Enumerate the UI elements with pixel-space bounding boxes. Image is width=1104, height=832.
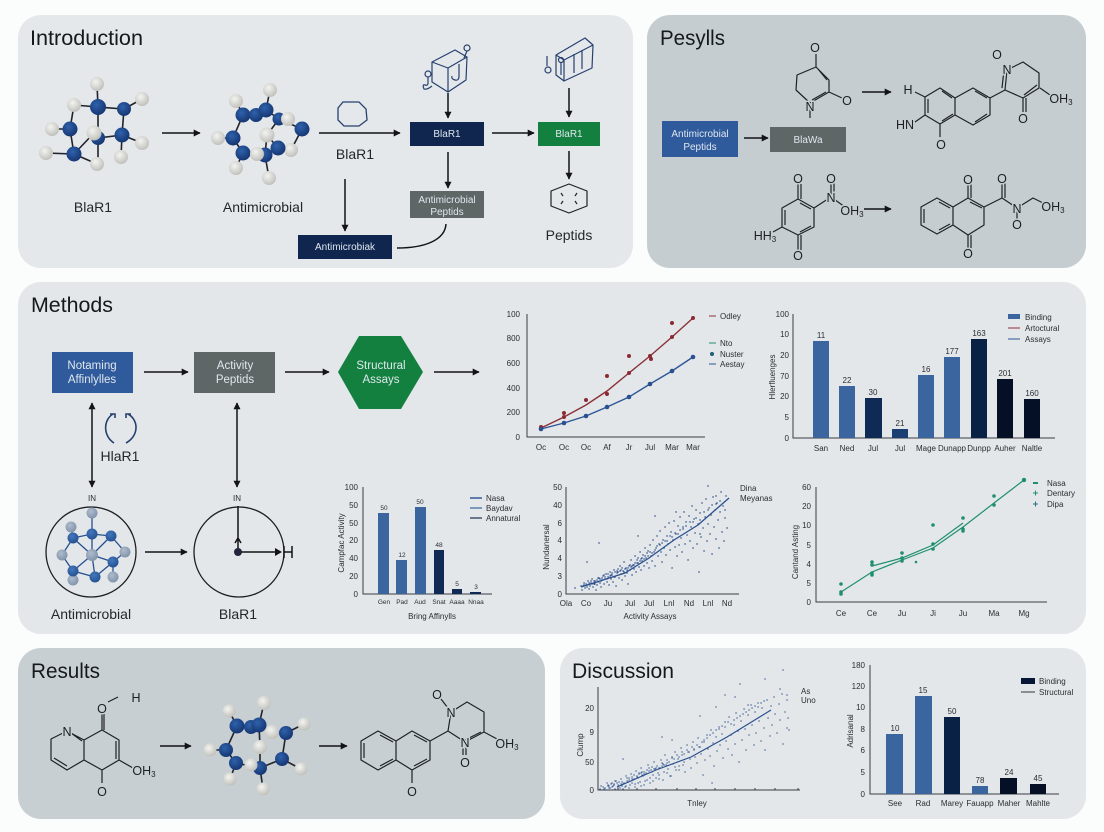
arrow [160,745,191,747]
chart: bar chart top: Hlerfluenges [768,355,777,399]
chart: line chart top [507,310,744,452]
legend [1008,313,1059,344]
chart: green line chart: Cantand Asting [791,525,800,579]
chart: bar chart top: 10 [780,330,790,339]
chart: bar chart bottom left: Bring Affinylls [408,612,456,621]
legend: Meyanas [740,494,772,503]
chart: bar chart bottom left: 48 [435,542,443,549]
structure: quinoline [51,691,156,799]
structure: bottom naphthoquinone [921,172,1065,261]
structure: bottom quinone: 3 [859,210,864,219]
chart: bar chart top: Auher [994,444,1016,453]
legend: Binding [1039,677,1066,686]
chart: bar chart top: 177 [945,347,959,356]
chart: bar chart top: 16 [922,365,931,374]
label: HlaR1: HlaR1 [101,448,140,464]
box: navy BlaR1: BlaR1 [433,129,461,140]
structure: top ring: N [805,100,815,114]
chart: bar chart bottom left: 40 [349,554,359,563]
structure: bottom quinone: O [793,172,803,186]
box: activity peptids: Activity [217,360,253,372]
legend [470,494,520,523]
chart: bar chart: Rad [916,799,930,808]
box: gray: BlaWa [793,135,823,146]
arrow [434,371,479,373]
structure: bottom naphthoquinone: 3 [1060,206,1065,215]
chart: bar chart top: 160 [1025,389,1039,398]
chart: line chart top: Mar [686,443,700,452]
chart: bar chart bottom left [337,483,520,621]
structure: bottom quinone: O [793,249,803,263]
chart: bar chart bottom left: Gen [378,599,391,606]
icon: molecule in circle [46,507,136,597]
structure: bottom naphthoquinone: O [997,172,1007,186]
chart: bar chart top: 201 [998,369,1012,378]
structure: bottom quinone: N [826,191,836,205]
chart: bar chart top: 100 [776,310,790,319]
chart: scatter activity assays: Ola [560,599,573,608]
legend: Binding [1025,313,1052,322]
arrow [744,137,768,139]
chart: scatter activity assays: 4 [558,554,563,563]
chart: bar chart: Mahlte [1026,799,1051,808]
structure: bottom quinone: OH [840,204,859,218]
chart: bar chart top: 11 [817,331,826,340]
structure: bottom quinone: 3 [772,235,777,244]
chart: bar chart top: Dunpp [967,444,991,453]
chart: scatter activity assays: 50 [553,483,563,492]
heading: pesylls: Pesylls [660,27,725,50]
chart: bar chart: 0 [861,790,866,799]
arrow [319,745,347,747]
chart: bar chart top: Mage [916,444,937,453]
chart: green line chart: 5 [807,541,812,550]
arrow [344,179,346,231]
chart: scatter: Tnley [687,799,707,808]
arrow [319,132,400,134]
structure: naphthyl heterocycle: 3 [514,743,519,752]
chart: scatter: 20 [585,704,595,713]
structure: naphthyl heterocycle: O [407,785,417,799]
legend: Baydav [486,504,513,513]
arrow [447,152,449,188]
structure: top ring: O [842,94,852,108]
icon: results ball-and-stick molecule [204,696,310,796]
label: antimicrobial: Antimicrobial [223,199,303,215]
legend [801,687,816,705]
label: BlaR1: BlaR1 [74,199,112,215]
box: navy antimicrobial: Antimicrobiak [315,242,376,253]
chart: bar chart: 6 [861,746,866,755]
structure: fused ring [896,48,1073,152]
icon: cube [423,45,470,92]
chart: line chart top: Oc [559,443,569,452]
chart: green line chart: Mg [1018,609,1030,618]
chart: scatter: 0 [590,786,595,795]
chart: bar chart: 24 [1005,768,1014,777]
structure: naphthyl heterocycle: N [446,706,456,720]
chart: bar chart: Maher [998,799,1021,808]
box: antimicrobial peptids: Peptids [683,142,717,153]
chart: scatter activity assays: Ju [604,599,612,608]
heading: results: Results [31,660,100,683]
icon: antimicrobial ball-and-stick molecule [211,83,310,185]
legend: Aestay [720,360,744,369]
chart: bar chart bottom left: 20 [349,572,359,581]
panel: results [18,648,545,819]
arrow [447,93,449,118]
structure: quinoline: O [97,702,107,716]
chart: bar chart top: Naltle [1022,444,1043,453]
chart: bar chart: 15 [919,686,928,695]
chart: scatter activity assays: Lnl [664,599,675,608]
chart: bar chart top: 21 [896,419,905,428]
chart: line chart top: Jul [645,443,655,452]
chart: scatter: 50 [585,758,595,767]
chart: bar chart top: Ned [840,444,854,453]
chart: scatter [576,670,816,808]
legend: Nasa [486,494,505,503]
chart: scatter activity assays: Co [581,599,592,608]
chart: scatter activity assays [542,483,772,621]
chart: bar chart top: 20 [780,392,790,401]
hexagon: structural assays [338,336,423,409]
box: antimicrobial peptids [662,121,738,157]
chart: bar chart: Fauapp [966,799,994,808]
arrow [568,151,570,179]
structure: top ring: O [810,41,820,55]
structure: quinoline: O [97,785,107,799]
arrow [862,91,891,93]
connector curve [397,224,446,248]
structure: bottom naphthoquinone: O [963,247,973,261]
box: navy antimicrobial [298,235,392,259]
chart: bar chart bottom left: 12 [398,552,406,559]
structure: top ring [796,41,852,118]
arrow [144,371,188,373]
legend: As [801,687,810,696]
chart: line chart top: Jr [626,443,633,452]
chart: green line chart: 5 [807,579,812,588]
arrow [864,208,891,210]
chart: scatter activity assays: 40 [553,501,563,510]
chart: scatter activity assays: Nd [722,599,732,608]
diagram: circle with axes [194,506,292,597]
chart: bar chart bottom left: Campfac Activity [337,513,346,573]
chart: bar chart top: San [814,444,828,453]
legend [740,484,772,503]
chart: line chart top: 400 [507,384,521,393]
double arrow [236,403,238,487]
chart: green line chart: Ju [959,609,967,618]
chart: line chart top: 0 [516,433,521,442]
chart: bar chart: 120 [852,682,866,691]
legend: Structural [1039,688,1073,697]
legend: Nuster [720,350,744,359]
structure: naphthyl heterocycle [361,688,519,799]
panel: discussion [560,648,1086,819]
structure: fused ring: O [1018,112,1028,126]
chart: green line chart: Ju [898,609,906,618]
structure: fused ring: 3 [1068,98,1073,107]
chart: bar chart: 78 [976,776,985,785]
chart: bar chart bottom left: 5 [455,581,459,588]
chart: bar chart bottom left: 0 [354,590,359,599]
chart: bar chart top: Dunapp [938,444,967,453]
chart: bar chart: 8 [861,725,866,734]
box: gray antimicrobial peptids: Peptids [430,207,464,218]
box: gray [770,127,846,152]
chart: bar chart bottom left: 100 [345,483,359,492]
chart: green line chart: 60 [802,483,812,492]
box: activity peptids [194,352,275,393]
chart: bar chart bottom left: Aaaa [449,599,465,606]
chart: bar chart bottom left: Aud [414,599,426,606]
chart: green line chart: Ce [867,609,878,618]
legend [709,312,744,369]
chart: line chart top: 600 [507,359,521,368]
icon: BlaR1 ball-and-stick molecule [39,77,149,171]
legend: Annatural [486,514,520,523]
legend: Odley [720,312,741,321]
box: gray antimicrobial peptids: Antimicrobial [418,195,476,206]
double arrow [91,403,93,487]
structure: naphthyl heterocycle: O [432,688,442,702]
structure: bottom quinone [754,172,864,263]
chart: bar chart: 5 [861,768,866,777]
chart: scatter activity assays: 6 [558,519,563,528]
chart: bar chart top: 163 [972,329,986,338]
chart: bar chart top: 30 [869,388,878,397]
box: notaming affinlylles: Affinlylles [68,374,116,386]
panel: introduction [18,15,633,268]
structure: fused ring: HN [896,118,914,132]
arrow [162,132,200,134]
chart: bar chart: Marey [941,799,963,808]
chart: bar chart top [768,310,1059,453]
structure: naphthyl heterocycle: O [460,756,470,770]
chart: bar chart: 45 [1034,774,1043,783]
label: small: IN [233,494,241,503]
chart: green line chart: Ma [988,609,1000,618]
chart: green line chart: 0 [807,598,812,607]
box: notaming affinlylles: Notaming [67,360,117,372]
arrow [568,88,570,117]
structure: bottom quinone: O [826,172,836,186]
box: notaming affinlylles [52,352,133,393]
chart: line chart top: Oc [536,443,546,452]
label: antimicrobial: Antimicrobial [51,606,131,622]
structure: bottom naphthoquinone: O [963,173,973,187]
chart: scatter: Clump [576,733,585,757]
chart: line chart top: 800 [507,334,521,343]
chart: bar chart bottom left: Nnaa [468,599,484,606]
heading: discussion: Discussion [572,660,674,683]
structure: bottom quinone: HH [754,229,772,243]
chart: scatter activity assays: 3 [558,572,563,581]
chart: scatter activity assays: Jul [644,599,654,608]
label: BlaR1: BlaR1 [219,606,257,622]
hexagon: structural assays: Assays [362,374,400,386]
arrow [145,551,187,553]
structure: fused ring: H [903,83,913,97]
chart: bar chart bottom left: 50 [380,505,388,512]
box: green BlaR1: BlaR1 [555,129,583,140]
legend [1021,677,1073,697]
structure: naphthyl heterocycle: OH [495,737,514,751]
chart: bar chart bottom left: 50 [349,501,359,510]
chart: bar chart bottom left: Snat [432,599,446,606]
chart: bar chart: 180 [852,661,866,670]
icon: cycle arcs [106,414,136,443]
legend: Dipa [1047,500,1064,509]
panel: pesylls [647,15,1086,268]
label: small: IN [88,494,96,503]
chart: scatter activity assays: Nundanersal [542,524,551,570]
structure: fused ring: OH [1049,92,1068,106]
chart: scatter: 9 [590,728,595,737]
structure: naphthyl heterocycle: N [460,736,470,750]
chart: scatter activity assays: Nd [684,599,694,608]
box: activity peptids: Peptids [216,374,254,386]
heading: methods: Methods [31,294,113,317]
structure: fused ring: N [1002,63,1012,77]
chart: green line chart: Ce [836,609,847,618]
chart: bar chart top: Jul [868,444,878,453]
chart: bar chart top: 20 [780,351,790,360]
chart: scatter activity assays: 0 [558,590,563,599]
legend: Uno [801,696,816,705]
structure: quinoline: 3 [151,770,156,779]
legend: Nto [720,339,733,348]
structure: fused ring: O [936,138,946,152]
chart: line chart top: Mar [665,443,679,452]
chart: green line chart: 4 [807,560,812,569]
chart: line chart top: Oc [581,443,591,452]
chart: bar chart top: Jul [895,444,905,453]
chart: green line chart [791,478,1075,618]
icon: ring outline [338,102,367,126]
hexagon: structural assays: Structural [356,360,406,372]
chart: line chart top: 200 [507,408,521,417]
legend [1033,479,1075,509]
chart: bar chart top: 70 [780,372,790,381]
chart: bar chart bottom left: Pad [396,599,408,606]
chart: bar chart [846,661,1073,808]
box: green BlaR1 [538,122,600,146]
label: peptids: Peptids [546,227,592,243]
legend: Artoctural [1025,324,1059,333]
arrow [492,132,534,134]
structure: quinoline: N [62,725,72,739]
box: antimicrobial peptids: Antimicrobial [671,129,729,140]
structure: quinoline: OH [132,764,151,778]
chart: green line chart: Ji [930,609,936,618]
legend: Dentary [1047,489,1075,498]
heading: introduction: Introduction [30,27,143,50]
structure: bottom naphthoquinone: OH [1041,200,1060,214]
structure: fused ring: O [992,48,1002,62]
panel: methods [18,282,1086,634]
icon: column device [545,38,593,81]
box: gray antimicrobial peptids [410,191,484,218]
chart: bar chart bottom left: 50 [349,519,359,528]
legend: Dina [740,484,757,493]
chart: scatter activity assays: Jul [625,599,635,608]
legend: Nasa [1047,479,1066,488]
chart: bar chart: Adrisanal [846,714,855,748]
chart: bar chart: 10 [856,703,866,712]
chart: bar chart: See [888,799,903,808]
chart: bar chart bottom left: 3 [474,584,478,591]
chart: line chart top: 100 [507,310,521,319]
legend: Assays [1025,335,1051,344]
chart: bar chart: 50 [948,707,957,716]
chart: bar chart bottom left: 50 [416,499,424,506]
chart: bar chart bottom left: 20 [349,536,359,545]
chart: green line chart: 10 [802,521,812,530]
chart: bar chart top: 0 [785,434,790,443]
chart: scatter activity assays: Lnl [703,599,714,608]
chart: scatter activity assays: 4 [558,536,563,545]
chart: scatter activity assays: Activity Assays [624,612,676,621]
structure: bottom naphthoquinone: N [1012,202,1022,216]
label: BlaR1 mid: BlaR1 [336,146,374,162]
chart: bar chart: 10 [891,724,900,733]
arrow [285,371,329,373]
chart: bar chart top: 5 [785,413,790,422]
structure: bottom naphthoquinone: O [1012,218,1022,232]
structure: quinoline: H [131,691,141,705]
icon: hexagon [551,184,587,213]
chart: line chart top: Af [603,443,612,452]
chart: bar chart top: 22 [843,376,852,385]
chart: green line chart: 20 [802,502,812,511]
box: navy BlaR1 [410,122,484,146]
